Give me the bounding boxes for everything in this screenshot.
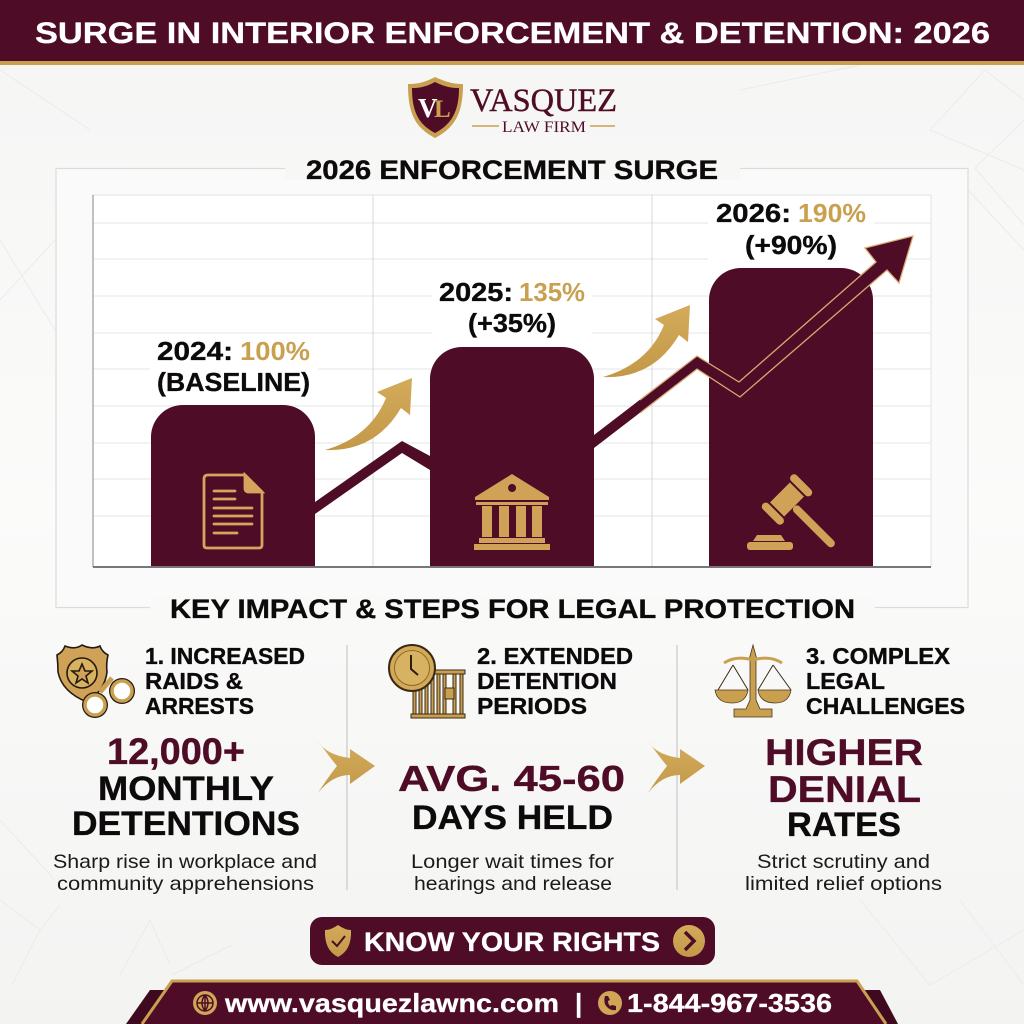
description: Sharp rise in workplace and xyxy=(53,851,317,873)
icon: VL shield: V xyxy=(418,93,438,123)
logo: Vasquez Law Firm xyxy=(408,77,617,138)
icon: scales of justice xyxy=(715,645,791,717)
stat: 12,000+ monthly detentions: 12,000+ xyxy=(107,731,245,772)
header banner xyxy=(0,0,1024,65)
description: Strict scrutiny and xyxy=(757,851,930,873)
label: 2026: 2026: xyxy=(716,198,791,228)
label: 2024: 100% xyxy=(240,336,310,366)
button: know your rights xyxy=(310,917,715,965)
arrow: column 1 to 2 xyxy=(318,741,375,793)
chart heading: 2026 ENFORCEMENT SURGE xyxy=(306,155,718,185)
icon: phone xyxy=(598,991,622,1015)
label: 2024 xyxy=(150,336,318,397)
label: 2026: 190% xyxy=(798,198,866,228)
icon: courthouse xyxy=(474,474,550,550)
column 1: raids and arrests: 1. INCREASED xyxy=(145,643,305,669)
icon: document xyxy=(204,475,262,548)
panel: enforcement surge chart xyxy=(56,155,968,608)
title: SURGE IN INTERIOR ENFORCEMENT & DETENTION: 2026 xyxy=(35,17,990,50)
column 3: legal challenges xyxy=(715,643,965,895)
column 3: legal challenges: CHALLENGES xyxy=(806,693,965,719)
icon: globe xyxy=(193,991,217,1015)
description: hearings and release xyxy=(414,873,612,895)
column 1: raids and arrests: ARRESTS xyxy=(145,693,254,719)
label: 2025: (+35%) xyxy=(468,308,556,338)
stat: average days held: DAYS HELD xyxy=(412,799,613,837)
label: 2026: (+90%) xyxy=(745,230,837,260)
icon: gavel xyxy=(747,473,851,563)
footer contact bar: 1-844-967-3536 xyxy=(627,988,832,1018)
arrow: column 2 to 3 xyxy=(648,741,705,793)
stat: 12,000+ monthly detentions: MONTHLY xyxy=(98,770,274,808)
description xyxy=(745,851,942,895)
description xyxy=(411,851,615,895)
stat: 12,000+ monthly detentions xyxy=(72,731,300,843)
column 2: extended detention xyxy=(389,643,633,895)
bar: 2024 xyxy=(151,405,315,566)
description: limited relief options xyxy=(745,873,942,895)
column 3: legal challenges: 3. COMPLEX xyxy=(806,643,950,669)
stat: higher denial rates: HIGHER xyxy=(765,732,923,773)
label: 2024: 2024: xyxy=(157,336,233,366)
logo: Vasquez Law Firm: LAW FIRM xyxy=(502,119,586,136)
label: 2025: 135% xyxy=(519,277,585,307)
label: 2024: (BASELINE) xyxy=(157,367,310,397)
column 1: raids and arrests xyxy=(53,643,317,895)
label: 2025 xyxy=(432,277,592,338)
icon: badge and handcuffs xyxy=(57,645,135,718)
trend line arrow xyxy=(315,236,913,514)
logo: Vasquez Law Firm: VASQUEZ xyxy=(470,83,617,119)
footer contact bar xyxy=(126,981,898,1024)
icon: VL shield xyxy=(408,77,463,138)
stat: average days held xyxy=(398,758,625,837)
stat: higher denial rates xyxy=(765,732,923,844)
gold growth arrow 1 xyxy=(325,378,412,450)
bar: 2026 xyxy=(709,268,873,566)
button: know your rights: KNOW YOUR RIGHTS xyxy=(364,927,660,957)
icon: shield check xyxy=(325,925,351,957)
bar: 2025 xyxy=(430,347,594,566)
column 3: legal challenges: LEGAL xyxy=(806,668,885,694)
description: community apprehensions xyxy=(57,873,314,895)
stat: average days held: AVG. 45-60 xyxy=(398,758,625,799)
gold growth arrow 2 xyxy=(603,305,690,377)
label: 2026 xyxy=(708,198,874,261)
stat: 12,000+ monthly detentions: DETENTIONS xyxy=(72,805,300,843)
column 1: raids and arrests: RAIDS & xyxy=(145,668,243,694)
icon: chevron circle xyxy=(673,925,705,957)
stat: higher denial rates: DENIAL xyxy=(768,769,921,810)
label: 2025: 2025: xyxy=(439,277,513,307)
description xyxy=(53,851,317,895)
column 2: extended detention: DETENTION xyxy=(477,668,617,694)
section heading: key impact: KEY IMPACT & STEPS FOR LEGAL PROTECTION xyxy=(170,594,855,624)
column 2: extended detention: 2. EXTENDED xyxy=(477,643,633,669)
stat: higher denial rates: RATES xyxy=(787,806,901,844)
icon: clock and cell xyxy=(389,645,465,718)
icon: VL shield: L xyxy=(434,96,451,123)
column 2: extended detention: PERIODS xyxy=(477,693,587,719)
description: Longer wait times for xyxy=(411,851,615,873)
footer contact bar: www.vasquezlawnc.com xyxy=(224,988,559,1018)
footer contact bar: | xyxy=(575,988,582,1018)
